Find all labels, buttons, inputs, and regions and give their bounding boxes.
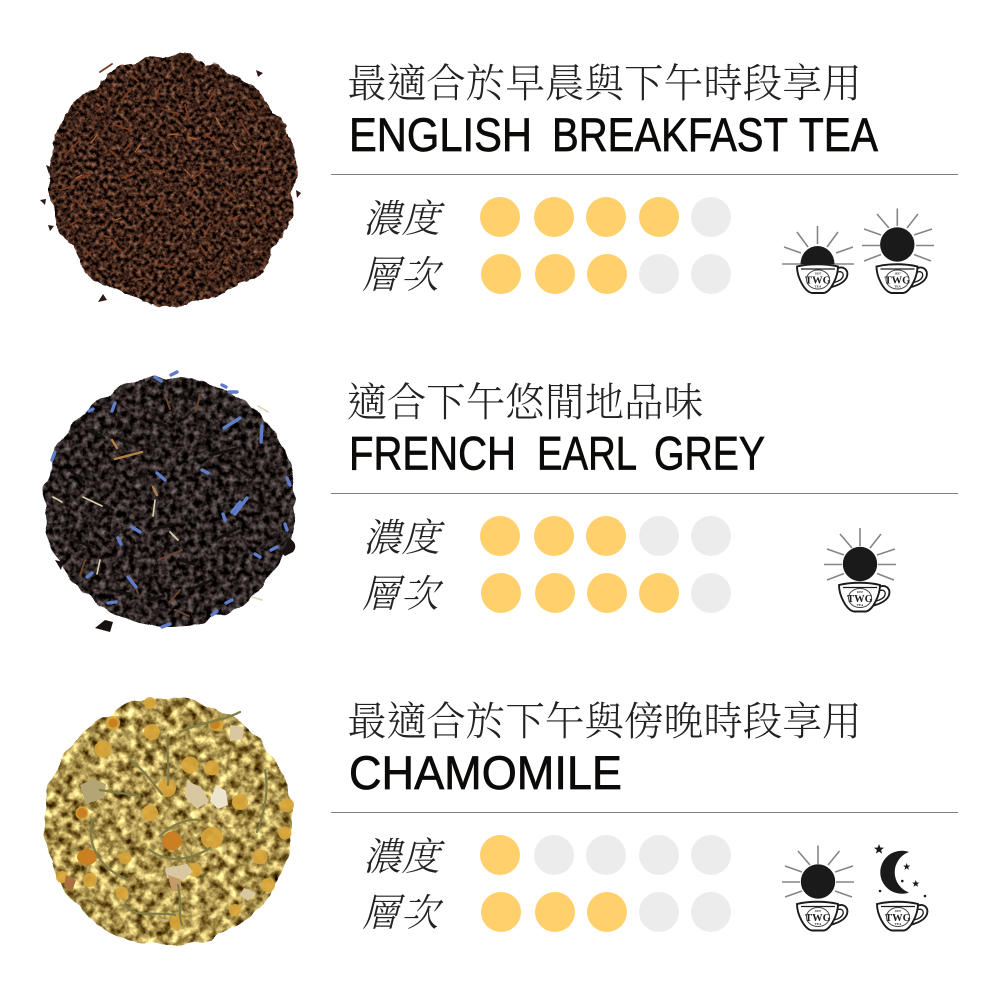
heading: tea name: CHAMOMILE [349,746,622,799]
heading: tea name: BREAKFAST [552,108,788,161]
panel: English Breakfast Tea [40,56,958,304]
panel: French Earl Grey [45,372,958,632]
heading: tea name: ENGLISH [349,108,532,161]
rating: depth 3 of 5 [481,254,731,294]
rating: depth 3 of 5 [481,892,731,932]
heading: tea name: GREY [654,426,765,480]
heading: best time: 適合下午悠閒地品味 [347,381,703,425]
icon: morning sun rising over cup: TWG [805,275,831,286]
label: strength: 濃度 [363,837,446,879]
heading: tea name [349,108,879,161]
icon: afternoon sun above cup: 1837 [815,909,822,913]
label: strength: 濃度 [363,518,446,560]
icon: afternoon sun above cup: TEA [857,603,864,607]
heading: best time: 最適合於早晨與下午時段享用 [347,62,862,106]
label: depth: 層次 [362,893,444,935]
icon: morning sun rising over cup: 1837 [815,272,822,276]
icon: afternoon sun above cup: TWG [805,913,831,924]
panel: Chamomile [44,697,958,946]
heading: best time: 最適合於下午與傍晚時段享用 [347,700,862,744]
icon: afternoon sun above cup: TWG [847,594,873,605]
image: English Breakfast tea leaves [40,56,301,304]
icon: midday sun above cup: TEA [894,284,901,288]
heading: tea name: FRENCH [349,426,516,480]
label: strength: 濃度 [363,199,446,241]
image: French Earl Grey tea leaves with blue petals [45,372,295,632]
icon: morning sun rising over cup: TEA [815,284,822,288]
heading: tea name: EARL [537,426,637,480]
icon: crescent moon and stars above cup: 1837 [895,909,902,913]
icon: afternoon sun above cup: TEA [815,922,822,926]
icon: crescent moon and stars above cup: TEA [895,922,902,926]
icon: crescent moon and stars above cup: TWG [885,913,911,924]
icon: afternoon sun above cup [824,528,896,612]
image: dried chamomile flowers [44,697,294,946]
icon: morning sun rising over cup [782,226,854,293]
rating: strength 1 of 5 [480,835,731,875]
icon: midday sun above cup [862,208,934,293]
rating: strength 3 of 5 [480,516,731,556]
rating: depth 4 of 5 [481,573,731,613]
label: depth: 層次 [362,574,444,616]
icon: midday sun above cup: TWG [885,275,910,286]
rating: strength 4 of 5 [480,197,731,237]
heading: tea name: TEA [799,108,879,161]
icon: afternoon sun above cup [782,846,854,930]
label: depth: 層次 [362,255,444,297]
heading: tea name [349,426,765,480]
icon: crescent moon and stars above cup [874,844,927,930]
icon: midday sun above cup: 1837 [894,272,901,276]
icon: afternoon sun above cup: 1837 [857,590,864,594]
